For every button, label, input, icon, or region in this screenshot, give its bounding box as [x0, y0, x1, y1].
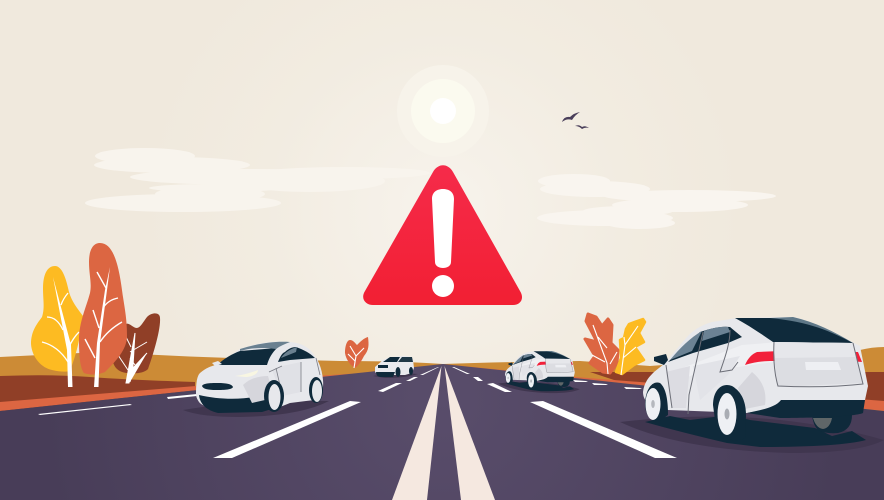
warning sign: [363, 165, 522, 305]
exclamation bar: [432, 189, 454, 268]
tree: oak yellow: [616, 319, 645, 375]
sun: [397, 65, 489, 157]
tree: brown: [113, 313, 160, 383]
tree: yellow: [31, 266, 83, 387]
road: [0, 364, 884, 500]
car: middle rear view: [498, 351, 580, 393]
exclamation dot: [432, 275, 454, 297]
tree: oak orange: [585, 314, 618, 374]
car: front left: [183, 342, 329, 417]
lane dashes: right: [452, 367, 677, 458]
clouds: right: [537, 174, 776, 229]
car: large rear view: [620, 317, 884, 453]
car: far oncoming: [373, 356, 418, 378]
clouds: left: [85, 148, 430, 212]
hills: right: [443, 347, 884, 420]
warning triangle: [363, 165, 522, 305]
birds: [562, 112, 589, 129]
lane dashes: left: [38, 367, 439, 458]
tree: small distant: [345, 337, 369, 368]
hills: left: [0, 352, 443, 420]
tree: orange: [79, 243, 127, 387]
centre double line: [392, 366, 495, 500]
